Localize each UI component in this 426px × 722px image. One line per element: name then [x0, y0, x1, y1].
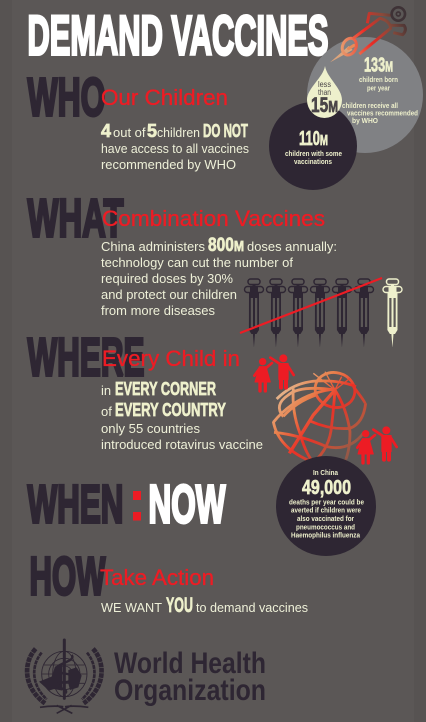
- text block: where: EVERY COUNTRY: [115, 399, 226, 420]
- circle: 133M: 133M: [364, 54, 393, 76]
- circle: 133M: per year: [367, 84, 390, 92]
- icon: syringes: [240, 278, 402, 347]
- text block: where: only 55 countries: [101, 421, 201, 436]
- icon: children top: [254, 354, 294, 391]
- panel: how: [30, 546, 308, 617]
- circle: 110M: [269, 102, 357, 190]
- text block: how: WE WANT: [101, 600, 162, 615]
- text block: where: EVERY CORNER: [115, 378, 216, 399]
- text block: who: out of: [113, 125, 146, 140]
- circle: 110M: 110M: [299, 128, 328, 150]
- subheading: Take Action: Take Action: [100, 565, 214, 590]
- circle: 133M: children receive all: [342, 101, 398, 110]
- logo: World Health Organization: Organization: [114, 674, 266, 707]
- text block: what: from more diseases: [101, 303, 215, 318]
- circle: 49,000 deaths: [276, 456, 376, 556]
- text block: where: of: [101, 404, 112, 419]
- text block: who: [101, 121, 249, 172]
- heading: WHEN: WHEN: [28, 474, 124, 534]
- icon: children bottom: [357, 426, 397, 463]
- circle: 133M: by WHO: [352, 116, 378, 125]
- subheading: Every Child in: Every Child in: [102, 346, 240, 371]
- circle: 49,000 deaths: deaths per year could be: [289, 498, 364, 506]
- drop: less than 15M: 15M: [311, 94, 338, 117]
- text block: where: introduced rotavirus vaccine: [101, 437, 263, 452]
- text block: who: 5: [147, 121, 157, 141]
- circle: 110M: vaccinations: [294, 157, 332, 166]
- drop: less than 15M: than: [318, 88, 331, 97]
- text block: what: 800M: [208, 235, 244, 256]
- text block: who: have access to all vaccines: [101, 141, 249, 156]
- logo: World Health Organization: [27, 640, 266, 713]
- text block: what: doses annually:: [247, 239, 337, 254]
- text block: what: technology can cut the number of: [101, 255, 293, 270]
- text block: what: required doses by 30%: [101, 271, 233, 286]
- text block: what: and protect our children: [101, 287, 237, 302]
- heading: WHAT: WHAT: [28, 188, 124, 248]
- circle: 49,000 deaths: Haemophilus influenza: [291, 530, 361, 540]
- emblem: [27, 640, 102, 713]
- text block: who: recommended by WHO: [101, 157, 236, 172]
- circle: 133M: children born: [359, 75, 398, 84]
- circle: 49,000 deaths: averted if children were: [291, 506, 361, 514]
- subheading: Combination Vaccines: Combination Vaccines: [102, 206, 325, 231]
- text block: what: China administers: [101, 239, 205, 254]
- wordmark: World Health: [114, 647, 266, 680]
- circle: 49,000 deaths: 49,000: [302, 477, 351, 499]
- colon: [133, 491, 141, 520]
- text block: how: [101, 594, 308, 617]
- heading: HOW: HOW: [30, 546, 106, 606]
- heading: NOW: NOW: [148, 474, 226, 534]
- text block: where: in: [101, 383, 111, 398]
- circle: 49,000 deaths: pneumococcus and: [296, 522, 355, 532]
- heading: WHO: WHO: [28, 68, 106, 128]
- text block: who: 4: [101, 121, 111, 141]
- text block: how: YOU: [166, 594, 193, 617]
- heading: WHERE: WHERE: [28, 328, 144, 388]
- icon: globe: [273, 368, 366, 463]
- circle: 49,000 deaths: also vaccinated for: [297, 514, 354, 523]
- subheading: Our Children: Our Children: [101, 85, 228, 110]
- icon: syringe: [330, 7, 405, 62]
- text block: where: [101, 378, 263, 452]
- panel: who: [28, 68, 249, 172]
- panel: when: [28, 474, 226, 534]
- circle: 49,000 deaths: In China: [313, 468, 339, 477]
- panel: what: [28, 188, 402, 347]
- text block: who: children: [157, 125, 200, 140]
- panel: statistics circles: [269, 7, 423, 190]
- text block: what: [101, 235, 337, 318]
- text block: who: DO NOT: [203, 121, 248, 141]
- circle: 133M: [307, 37, 423, 153]
- circle: 110M: children with some: [285, 149, 342, 158]
- drop: less than 15M: [307, 66, 342, 118]
- panel: where: [28, 328, 397, 556]
- drop: less than 15M: less: [318, 80, 331, 89]
- text block: how: to demand vaccines: [196, 600, 308, 615]
